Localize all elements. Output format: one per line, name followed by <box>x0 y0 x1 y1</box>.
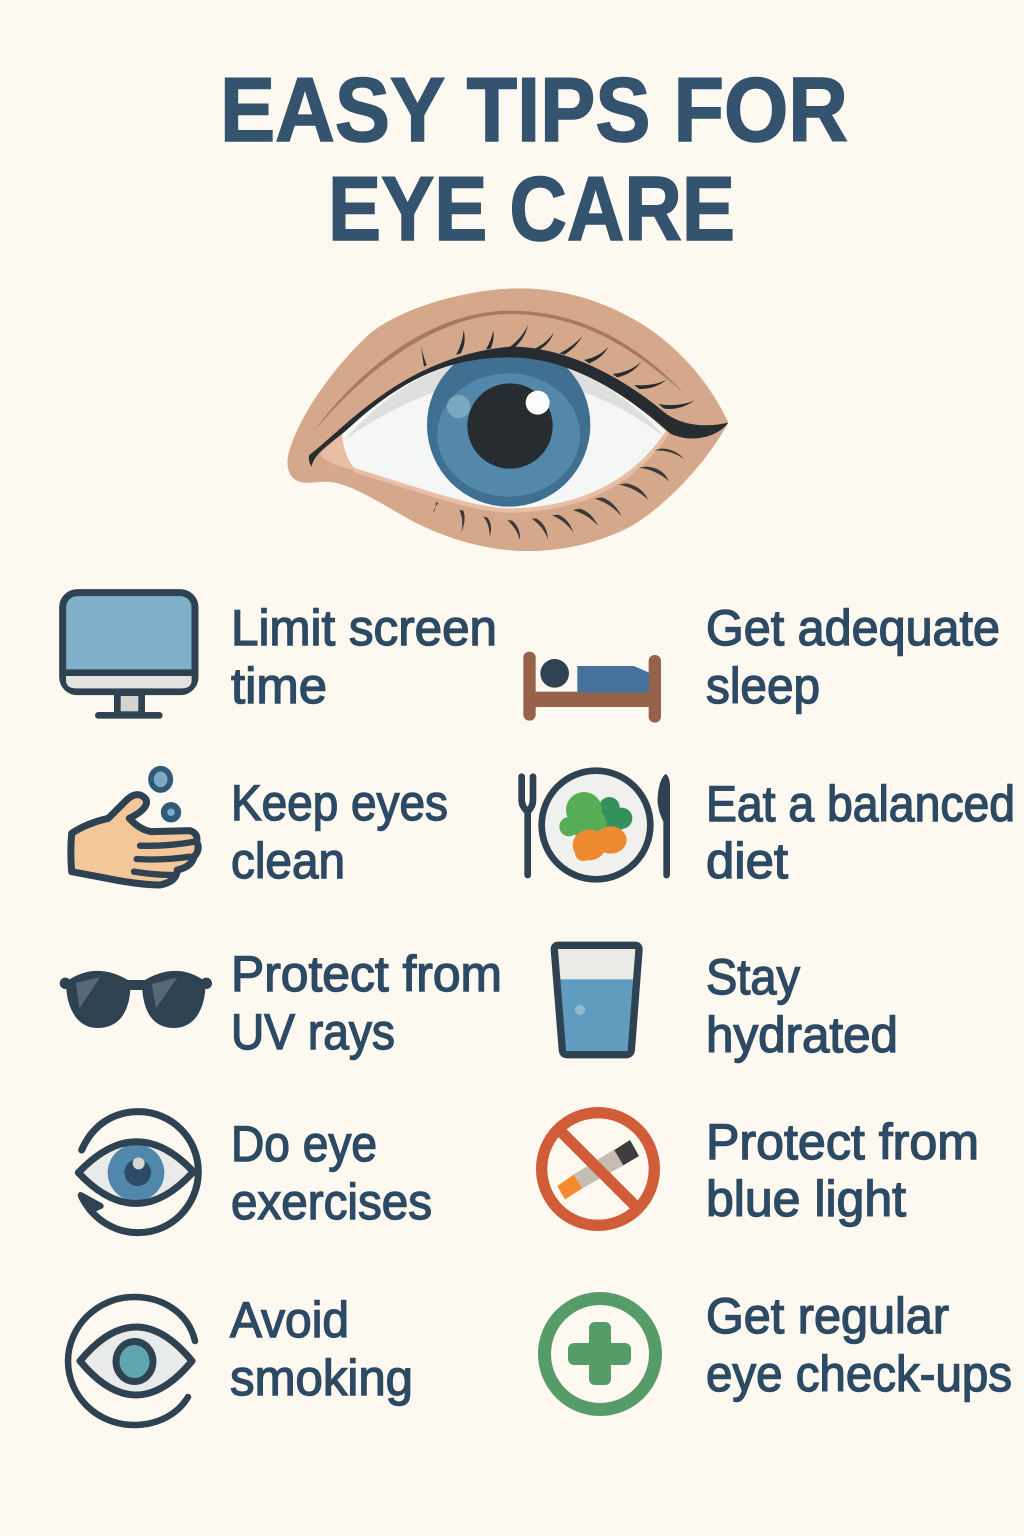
label: get regular eye check-ups: eye check-ups <box>706 1345 1012 1402</box>
label: stay hydrated <box>706 948 898 1063</box>
label: eat a balanced diet: diet <box>706 832 788 889</box>
title <box>220 60 848 260</box>
label: avoid smoking: Avoid <box>230 1291 349 1348</box>
label: do eye exercises: exercises <box>231 1173 432 1230</box>
label: get adequate sleep: sleep <box>706 657 820 714</box>
iris <box>427 343 590 507</box>
tip: limit screen time <box>63 593 497 715</box>
lower lid rim <box>353 433 667 511</box>
label: limit screen time <box>231 599 497 714</box>
tear duct <box>320 433 357 471</box>
icon: green medical cross <box>544 1298 656 1410</box>
label: protect from blue light <box>706 1113 979 1227</box>
tip: get regular eye check-ups <box>544 1287 1012 1410</box>
icon: sunglasses <box>60 971 212 1028</box>
tip: avoid smoking <box>68 1291 413 1425</box>
tip: protect from uv rays <box>60 945 502 1060</box>
tip: do eye exercises <box>78 1112 432 1233</box>
icon: no smoking sign <box>542 1113 654 1225</box>
label: keep eyes clean: clean <box>231 832 345 889</box>
tip: stay hydrated <box>554 945 898 1063</box>
label: limit screen time: Limit screen <box>231 599 497 656</box>
label: protect from uv rays: Protect from <box>231 945 502 1002</box>
label: protect from blue light: Protect from <box>706 1113 979 1170</box>
tip: get adequate sleep <box>523 599 1000 723</box>
label: protect from uv rays <box>231 945 502 1060</box>
icon: eye with rotation arrows <box>78 1112 198 1233</box>
hero eye illustration <box>288 288 728 551</box>
label: keep eyes clean: Keep eyes <box>231 774 448 831</box>
icon: monitor <box>63 593 195 715</box>
icon: hand with water drops <box>71 769 198 885</box>
label: stay hydrated: hydrated <box>706 1006 898 1063</box>
tip: eat a balanced diet <box>522 771 1015 889</box>
sclera <box>342 357 667 509</box>
label: stay hydrated: Stay <box>706 948 801 1005</box>
title: EASY TIPS FOR <box>220 60 848 161</box>
eyelid crease <box>314 311 683 431</box>
eye skin <box>288 288 728 551</box>
label: eat a balanced diet <box>706 775 1015 889</box>
label: get regular eye check-ups: Get regular <box>706 1287 949 1344</box>
label: do eye exercises: Do eye <box>231 1115 377 1172</box>
tip: protect from blue light <box>542 1113 979 1227</box>
icon: eye in circle <box>68 1297 195 1425</box>
label: avoid smoking <box>230 1291 413 1406</box>
label: protect from uv rays: UV rays <box>231 1003 395 1060</box>
label: protect from blue light: blue light <box>706 1170 906 1227</box>
label: get regular eye check-ups <box>706 1287 1012 1402</box>
label: get adequate sleep <box>706 599 1000 714</box>
lower lashes <box>433 449 684 540</box>
sclera shadow <box>344 357 664 440</box>
upper lashes <box>421 325 694 409</box>
label: get adequate sleep: Get adequate <box>706 599 1000 656</box>
icon: plate with fork and knife <box>522 771 670 879</box>
label: avoid smoking: smoking <box>230 1349 413 1406</box>
label: do eye exercises <box>231 1115 432 1230</box>
upper lash line <box>309 347 728 467</box>
label: keep eyes clean <box>231 774 448 889</box>
label: limit screen time: time <box>231 657 327 714</box>
icon: glass of water <box>554 945 639 1055</box>
tip: keep eyes clean <box>71 769 448 889</box>
icon: bed <box>523 652 661 723</box>
title: EYE CARE <box>328 159 735 260</box>
